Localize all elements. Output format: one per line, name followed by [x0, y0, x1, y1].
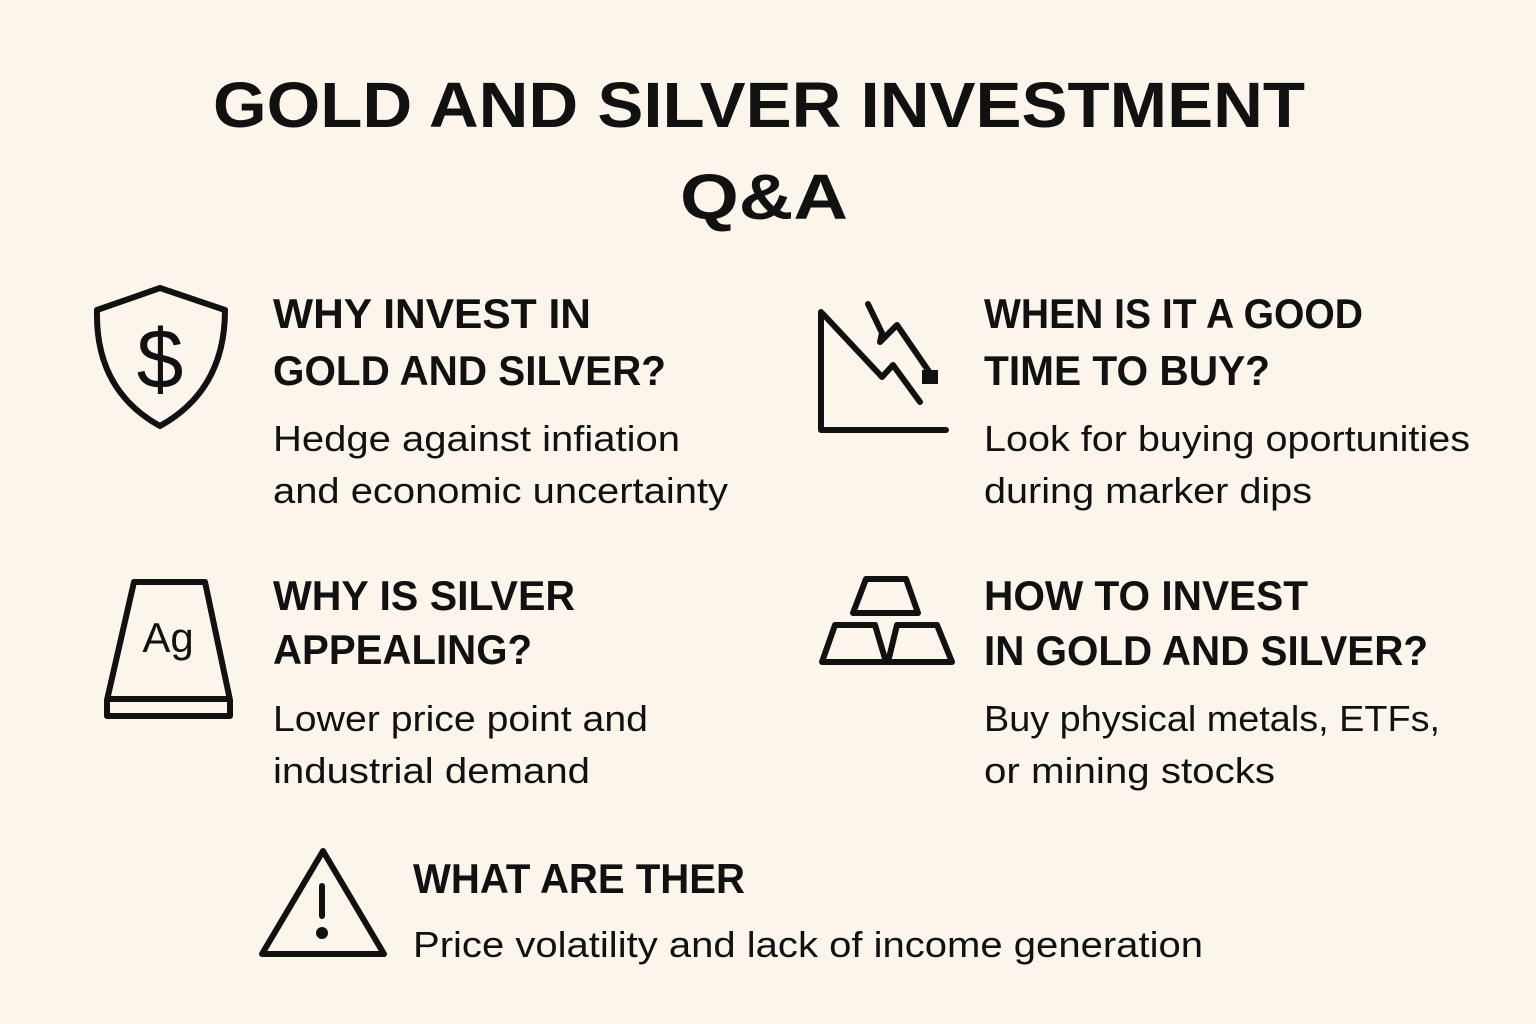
icon: Ag bar: Ag	[142, 614, 194, 661]
panel: why invest: GOLD AND SILVER?	[273, 347, 666, 394]
panel: how to invest: or mining stocks	[984, 750, 1275, 791]
panel: why invest	[273, 290, 728, 511]
title: GOLD AND SILVER INVESTMENT	[213, 69, 1305, 141]
panel: risks: WHAT ARE THER	[413, 855, 745, 902]
panel: how to invest: IN GOLD AND SILVER?	[984, 627, 1428, 674]
panel: silver appealing: Lower price point and	[273, 698, 648, 739]
icon: stacked bars	[822, 579, 952, 662]
panel: risks	[413, 855, 1203, 965]
title: Q&A	[680, 161, 848, 233]
panel: why invest: and economic uncertainty	[273, 470, 728, 511]
panel: how to invest: HOW TO INVEST	[984, 572, 1308, 619]
panel: silver appealing: industrial demand	[273, 750, 590, 791]
panel: when to buy: Look for buying oportunities	[984, 418, 1470, 459]
panel: when to buy	[984, 290, 1470, 511]
panel: when to buy: TIME TO BUY?	[984, 347, 1270, 394]
panel: when to buy: during marker dips	[984, 470, 1312, 511]
icon: shield with dollar	[97, 288, 225, 426]
panel: silver appealing: APPEALING?	[273, 626, 532, 673]
title	[213, 69, 1305, 233]
panel: how to invest	[984, 572, 1440, 791]
icon: Ag bar	[107, 582, 230, 716]
panel: when to buy: WHEN IS IT A GOOD	[984, 290, 1363, 337]
panel: how to invest: Buy physical metals, ETFs,	[984, 698, 1440, 739]
panel: silver appealing: WHY IS SILVER	[273, 572, 575, 619]
panel: risks: Price volatility and lack of income generation	[413, 924, 1203, 965]
icon: shield with dollar: $	[137, 312, 183, 406]
panel: why invest: Hedge against infiation	[273, 418, 680, 459]
icon: warning	[262, 851, 384, 954]
icon: falling chart	[821, 304, 946, 430]
panel: silver appealing	[273, 572, 648, 791]
panel: why invest: WHY INVEST IN	[273, 290, 591, 337]
